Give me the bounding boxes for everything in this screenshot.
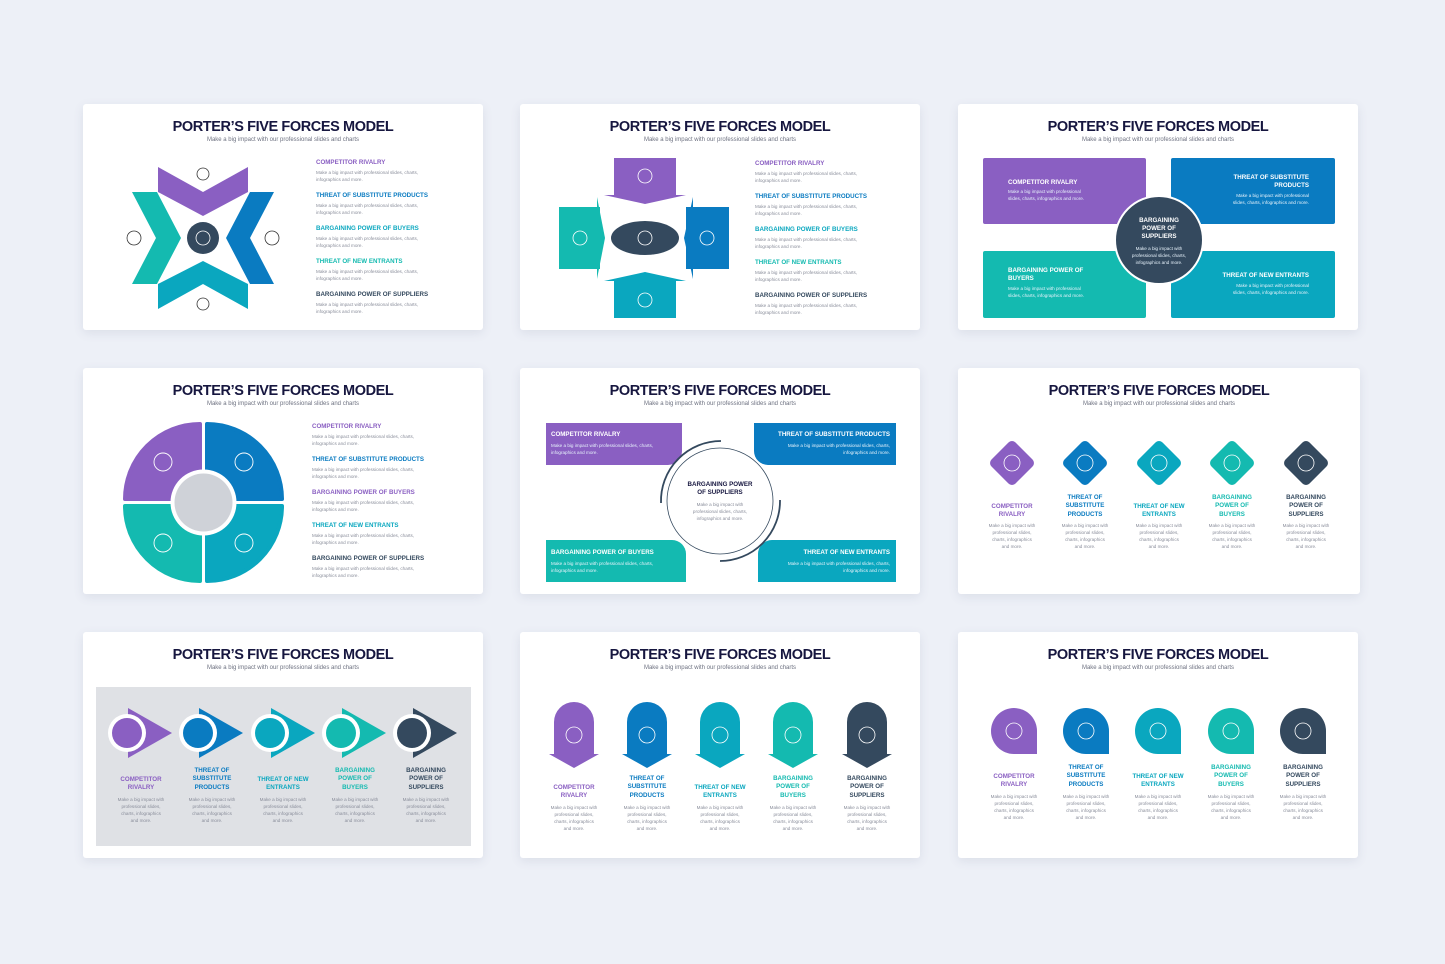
grey panel with arrow steps: charts, infographics [121,811,162,816]
teardrop row: BUYERS [1218,781,1244,788]
box grid [983,158,1335,318]
text list: THREAT OF SUBSTITUTE PRODUCTS [312,456,424,463]
text list: THREAT OF NEW ENTRANTS [755,259,842,266]
text list: infographics and more. [316,243,363,248]
shield row: COMPETITOR [553,784,595,791]
quadrant diagram [125,424,282,581]
shield row: Make a big impact with [770,805,817,810]
slide 5: corner boxes around circle [520,368,920,594]
corner boxes and center circle: infographics and more. [697,516,743,521]
text list [755,160,867,315]
text list: Make a big impact with professional slides, charts, [316,302,418,307]
text list: infographics and more. [312,507,359,512]
grey panel with arrow steps: professional slides, [335,804,375,809]
teardrop row: Make a big impact with [1135,794,1182,799]
shield row: charts, infographics [773,819,814,824]
shield row: charts, infographics [847,819,888,824]
text list: Make a big impact with professional slides, charts, [755,237,857,242]
shield row: THREAT OF [630,775,665,782]
text list: infographics and more. [755,310,802,315]
corner boxes and center circle: infographics and more. [551,568,598,573]
diamond row: Make a big impact with [1209,523,1256,528]
diamond row: POWER OF [1289,502,1323,509]
text list: COMPETITOR RIVALRY [755,160,825,167]
text list: Make a big impact with professional slides, charts, [312,566,414,571]
teardrop row: RIVALRY [1001,781,1028,788]
box grid: Make a big impact with [1136,246,1183,251]
teardrop row: THREAT OF [1069,764,1104,771]
diamond row: charts, infographics [1212,537,1253,542]
title: PORTER’S FIVE FORCES MODEL [610,119,831,135]
text list: BARGAINING POWER OF SUPPLIERS [316,291,428,298]
slide 8: downward arrow shields [520,632,920,858]
text list: infographics and more. [755,244,802,249]
grey panel with arrow steps: and more. [131,818,151,823]
corner boxes and center circle: BARGAINING POWER [688,481,753,488]
teardrop row: and more. [1076,815,1096,820]
grey panel with arrow steps: and more. [416,818,436,823]
shield row: professional slides, [554,812,594,817]
teardrop row: professional slides, [1283,801,1323,806]
grey panel with arrow steps: POWER OF [338,775,372,782]
corner boxes and center circle: Make a big impact with professional slides, charts, [788,443,890,448]
slide 1: chevron star [83,104,483,330]
teardrop row: POWER OF [1286,772,1320,779]
slide 7: circle arrows on grey panel [83,632,483,858]
text list [316,159,428,314]
teardrop row: THREAT OF NEW [1132,773,1184,780]
title [173,383,394,407]
grey panel with arrow steps: Make a big impact with [189,797,236,802]
diamond row: charts, infographics [1139,537,1180,542]
corner boxes and center circle: THREAT OF SUBSTITUTE PRODUCTS [778,431,890,438]
title: PORTER’S FIVE FORCES MODEL [610,647,831,663]
grey panel with arrow steps: professional slides, [192,804,232,809]
grey panel with arrow steps: Make a big impact with [260,797,307,802]
box grid: POWER OF [1142,225,1176,232]
title: Make a big impact with our professional slides and charts [644,137,796,143]
teardrop row: and more. [1293,815,1313,820]
text list: infographics and more. [316,177,363,182]
diamond row: and more. [1002,544,1022,549]
box grid: PRODUCTS [1274,182,1309,189]
diamond row: professional slides, [1212,530,1252,535]
corner boxes and center circle: infographics and more. [843,568,890,573]
text list: Make a big impact with professional slides, charts, [755,204,857,209]
diamond row: SUBSTITUTE [1066,502,1104,509]
shield row: BARGAINING [773,775,813,782]
teardrop row: professional slides, [1211,801,1251,806]
title: PORTER’S FIVE FORCES MODEL [1049,383,1270,399]
corner boxes and center circle: COMPETITOR RIVALRY [551,431,621,438]
grey panel with arrow steps: SUBSTITUTE [193,775,231,782]
shield row: POWER OF [776,783,810,790]
diamond row: ENTRANTS [1142,511,1176,518]
title: Make a big impact with our professional slides and charts [207,401,359,407]
box grid: slides, charts, infographics and more. [1233,290,1309,295]
grey panel with arrow steps: charts, infographics [406,811,447,816]
shield row: SUBSTITUTE [628,783,666,790]
grey panel with arrow steps: ENTRANTS [266,784,300,791]
teardrop row: Make a big impact with [991,794,1038,799]
teardrop row: Make a big impact with [1280,794,1327,799]
teardrop row: SUPPLIERS [1285,781,1321,788]
title: Make a big impact with our professional slides and charts [644,401,796,407]
title: Make a big impact with our professional slides and charts [207,137,359,143]
shield row: and more. [637,826,657,831]
title [1048,647,1269,671]
title [173,647,394,671]
slide 4: flower quadrants [83,368,483,594]
corner boxes and center circle: THREAT OF NEW ENTRANTS [803,549,890,556]
shield row: PRODUCTS [630,792,664,799]
text list: THREAT OF SUBSTITUTE PRODUCTS [755,193,867,200]
title [1048,119,1269,143]
title [1049,383,1270,407]
shield row: POWER OF [850,783,884,790]
text list: THREAT OF NEW ENTRANTS [316,258,403,265]
teardrop row: and more. [1004,815,1024,820]
text list: infographics and more. [755,211,802,216]
diamond row: and more. [1296,544,1316,549]
text list: infographics and more. [312,441,359,446]
box grid: Make a big impact with professional [1236,283,1309,288]
text list: Make a big impact with professional slides, charts, [312,500,414,505]
diamond row: Make a big impact with [1062,523,1109,528]
text list: Make a big impact with professional slides, charts, [755,270,857,275]
slide 6: diamonds [958,368,1360,594]
title: Make a big impact with our professional slides and charts [1083,401,1235,407]
diamond row: THREAT OF NEW [1133,503,1185,510]
text list: Make a big impact with professional slides, charts, [316,203,418,208]
teardrop row: COMPETITOR [993,773,1035,780]
shield row: charts, infographics [700,819,741,824]
shield row: professional slides, [773,812,813,817]
box grid: slides, charts, infographics and more. [1233,200,1309,205]
title: PORTER’S FIVE FORCES MODEL [173,383,394,399]
shield row: and more. [857,826,877,831]
title: Make a big impact with our professional slides and charts [644,665,796,671]
teardrop row: SUBSTITUTE [1067,772,1105,779]
shield row: and more. [564,826,584,831]
title [610,647,831,671]
shield row: charts, infographics [627,819,668,824]
grey panel with arrow steps: professional slides, [121,804,161,809]
grey panel with arrow steps: charts, infographics [263,811,304,816]
teardrop row: charts, infographics [1211,808,1252,813]
title [610,119,831,143]
box grid: infographics and more. [1136,260,1182,265]
slide 2: arrow cross [520,104,920,330]
diamond row: professional slides, [1139,530,1179,535]
teardrop row: POWER OF [1214,772,1248,779]
text list: Make a big impact with professional slides, charts, [755,303,857,308]
grey panel with arrow steps: professional slides, [263,804,303,809]
title: PORTER’S FIVE FORCES MODEL [173,119,394,135]
diamond row: Make a big impact with [989,523,1036,528]
text list: BARGAINING POWER OF BUYERS [312,489,415,496]
grey panel with arrow steps: BARGAINING [406,767,446,774]
arrow cross diagram [559,158,729,318]
corner boxes and center circle [546,423,896,582]
text list: infographics and more. [312,474,359,479]
shield row: BUYERS [780,792,806,799]
diamond row: professional slides, [992,530,1032,535]
shield row: and more. [783,826,803,831]
title: PORTER’S FIVE FORCES MODEL [610,383,831,399]
text list: infographics and more. [755,178,802,183]
grey panel with arrow steps: Make a big impact with [332,797,379,802]
text list: infographics and more. [755,277,802,282]
box grid: THREAT OF SUBSTITUTE [1233,174,1309,181]
grey panel with arrow steps: RIVALRY [128,784,155,791]
corner boxes and center circle: infographics and more. [551,450,598,455]
box grid: BARGAINING POWER OF [1008,267,1084,274]
grey panel with arrow steps: PRODUCTS [195,784,229,791]
shield row: ENTRANTS [703,792,737,799]
text list: BARGAINING POWER OF BUYERS [316,225,419,232]
text list: Make a big impact with professional slides, charts, [312,533,414,538]
corner boxes and center circle: BARGAINING POWER OF BUYERS [551,549,654,556]
text list: BARGAINING POWER OF SUPPLIERS [755,292,867,299]
box grid: Make a big impact with professional [1008,286,1081,291]
box grid: COMPETITOR RIVALRY [1008,179,1078,186]
diamond row: PRODUCTS [1068,511,1102,518]
teardrop row: PRODUCTS [1069,781,1103,788]
box grid: BUYERS [1008,275,1034,282]
text list: infographics and more. [312,540,359,545]
teardrop row: BARGAINING [1211,764,1251,771]
box grid: SUPPLIERS [1141,233,1177,240]
text list: Make a big impact with professional slides, charts, [312,467,414,472]
text list: infographics and more. [312,573,359,578]
box grid: BARGAINING [1139,217,1179,224]
corner boxes and center circle: infographics and more. [843,450,890,455]
teardrop row: charts, infographics [1283,808,1324,813]
shield row: Make a big impact with [697,805,744,810]
corner boxes and center circle: Make a big impact with professional slides, charts, [788,561,890,566]
box grid: slides, charts, infographics and more. [1008,293,1084,298]
grey panel with arrow steps: THREAT OF NEW [257,776,309,783]
diamond row: SUPPLIERS [1288,511,1324,518]
grey panel with arrow steps: charts, infographics [335,811,376,816]
shield row: Make a big impact with [624,805,671,810]
teardrop row: Make a big impact with [1063,794,1110,799]
box grid: slides, charts, infographics and more. [1008,196,1084,201]
box grid: Make a big impact with professional [1236,193,1309,198]
teardrop row: BARGAINING [1283,764,1323,771]
slide 9: teardrop circles [958,632,1358,858]
text list: THREAT OF NEW ENTRANTS [312,522,399,529]
text list: COMPETITOR RIVALRY [312,423,382,430]
diamond row: charts, infographics [1065,537,1106,542]
diamond row: POWER OF [1215,502,1249,509]
grey panel with arrow steps: and more. [202,818,222,823]
teardrop row: charts, infographics [1138,808,1179,813]
title: PORTER’S FIVE FORCES MODEL [173,647,394,663]
shield row: THREAT OF NEW [694,784,746,791]
corner boxes and center circle: Make a big impact with professional slides, charts, [551,561,653,566]
teardrop row: charts, infographics [994,808,1035,813]
title: Make a big impact with our professional slides and charts [1082,665,1234,671]
grey panel with arrow steps: COMPETITOR [120,776,162,783]
title [173,119,394,143]
grey panel with arrow steps: BARGAINING [335,767,375,774]
text list: Make a big impact with professional slides, charts, [316,269,418,274]
box grid: THREAT OF NEW ENTRANTS [1222,272,1309,279]
text list: infographics and more. [316,309,363,314]
teardrop row: charts, infographics [1066,808,1107,813]
teardrop row: and more. [1221,815,1241,820]
diamond row: professional slides, [1065,530,1105,535]
text list: Make a big impact with professional slides, charts, [312,434,414,439]
corner boxes and center circle: professional slides, charts, [693,509,747,514]
diamond row: BARGAINING [1212,494,1252,501]
text list: Make a big impact with professional slides, charts, [316,170,418,175]
teardrop row: professional slides, [1138,801,1178,806]
diamond row: Make a big impact with [1136,523,1183,528]
text list: infographics and more. [316,276,363,281]
diamond row [988,439,1330,549]
diamond row: charts, infographics [1286,537,1327,542]
corner boxes and center circle: Make a big impact with [697,502,744,507]
grey panel with arrow steps: SUPPLIERS [408,784,444,791]
title: PORTER’S FIVE FORCES MODEL [1048,647,1269,663]
grey panel with arrow steps: BUYERS [342,784,368,791]
diamond row: charts, infographics [992,537,1033,542]
grey panel with arrow steps: charts, infographics [192,811,233,816]
shield row: charts, infographics [554,819,595,824]
text list: Make a big impact with professional slides, charts, [755,171,857,176]
grey panel with arrow steps: Make a big impact with [403,797,450,802]
shield row: BARGAINING [847,775,887,782]
grey panel with arrow steps: professional slides, [406,804,446,809]
title: PORTER’S FIVE FORCES MODEL [1048,119,1269,135]
text list: THREAT OF SUBSTITUTE PRODUCTS [316,192,428,199]
grey panel with arrow steps: and more. [273,818,293,823]
diamond row: COMPETITOR [991,503,1033,510]
diamond row: professional slides, [1286,530,1326,535]
teardrop row: and more. [1148,815,1168,820]
diamond row: BUYERS [1219,511,1245,518]
title: Make a big impact with our professional slides and charts [1082,137,1234,143]
shield row: professional slides, [847,812,887,817]
text list: BARGAINING POWER OF BUYERS [755,226,858,233]
diamond row: Make a big impact with [1283,523,1330,528]
diamond row: and more. [1149,544,1169,549]
text list: Make a big impact with professional slides, charts, [316,236,418,241]
text list: COMPETITOR RIVALRY [316,159,386,166]
slide 3: four boxes with center circle [958,104,1358,330]
text list [312,423,424,578]
grey panel with arrow steps: THREAT OF [195,767,230,774]
chevron diagram [127,167,279,310]
grey panel with arrow steps: and more. [345,818,365,823]
shield row: SUPPLIERS [849,792,885,799]
grey panel with arrow steps: Make a big impact with [118,797,165,802]
shield row: Make a big impact with [844,805,891,810]
diamond row: THREAT OF [1068,494,1103,501]
title [610,383,831,407]
grey panel with arrow steps: POWER OF [409,775,443,782]
shield row: Make a big impact with [551,805,598,810]
teardrop row: professional slides, [994,801,1034,806]
corner boxes and center circle: Make a big impact with professional slides, charts, [551,443,653,448]
shield row [549,702,892,831]
diamond row: RIVALRY [999,511,1026,518]
teardrop row: Make a big impact with [1208,794,1255,799]
box grid: professional slides, charts, [1132,253,1186,258]
diamond row: and more. [1075,544,1095,549]
shield row: RIVALRY [561,792,588,799]
teardrop row: ENTRANTS [1141,781,1175,788]
shield row: professional slides, [627,812,667,817]
teardrop row [991,708,1327,820]
shield row: and more. [710,826,730,831]
shield row: professional slides, [700,812,740,817]
diamond row: BARGAINING [1286,494,1326,501]
title: Make a big impact with our professional slides and charts [207,665,359,671]
corner boxes and center circle: OF SUPPLIERS [697,489,743,496]
text list: BARGAINING POWER OF SUPPLIERS [312,555,424,562]
text list: infographics and more. [316,210,363,215]
box grid: Make a big impact with professional [1008,189,1081,194]
teardrop row: professional slides, [1066,801,1106,806]
diamond row: and more. [1222,544,1242,549]
grey panel with arrow steps [96,687,471,846]
